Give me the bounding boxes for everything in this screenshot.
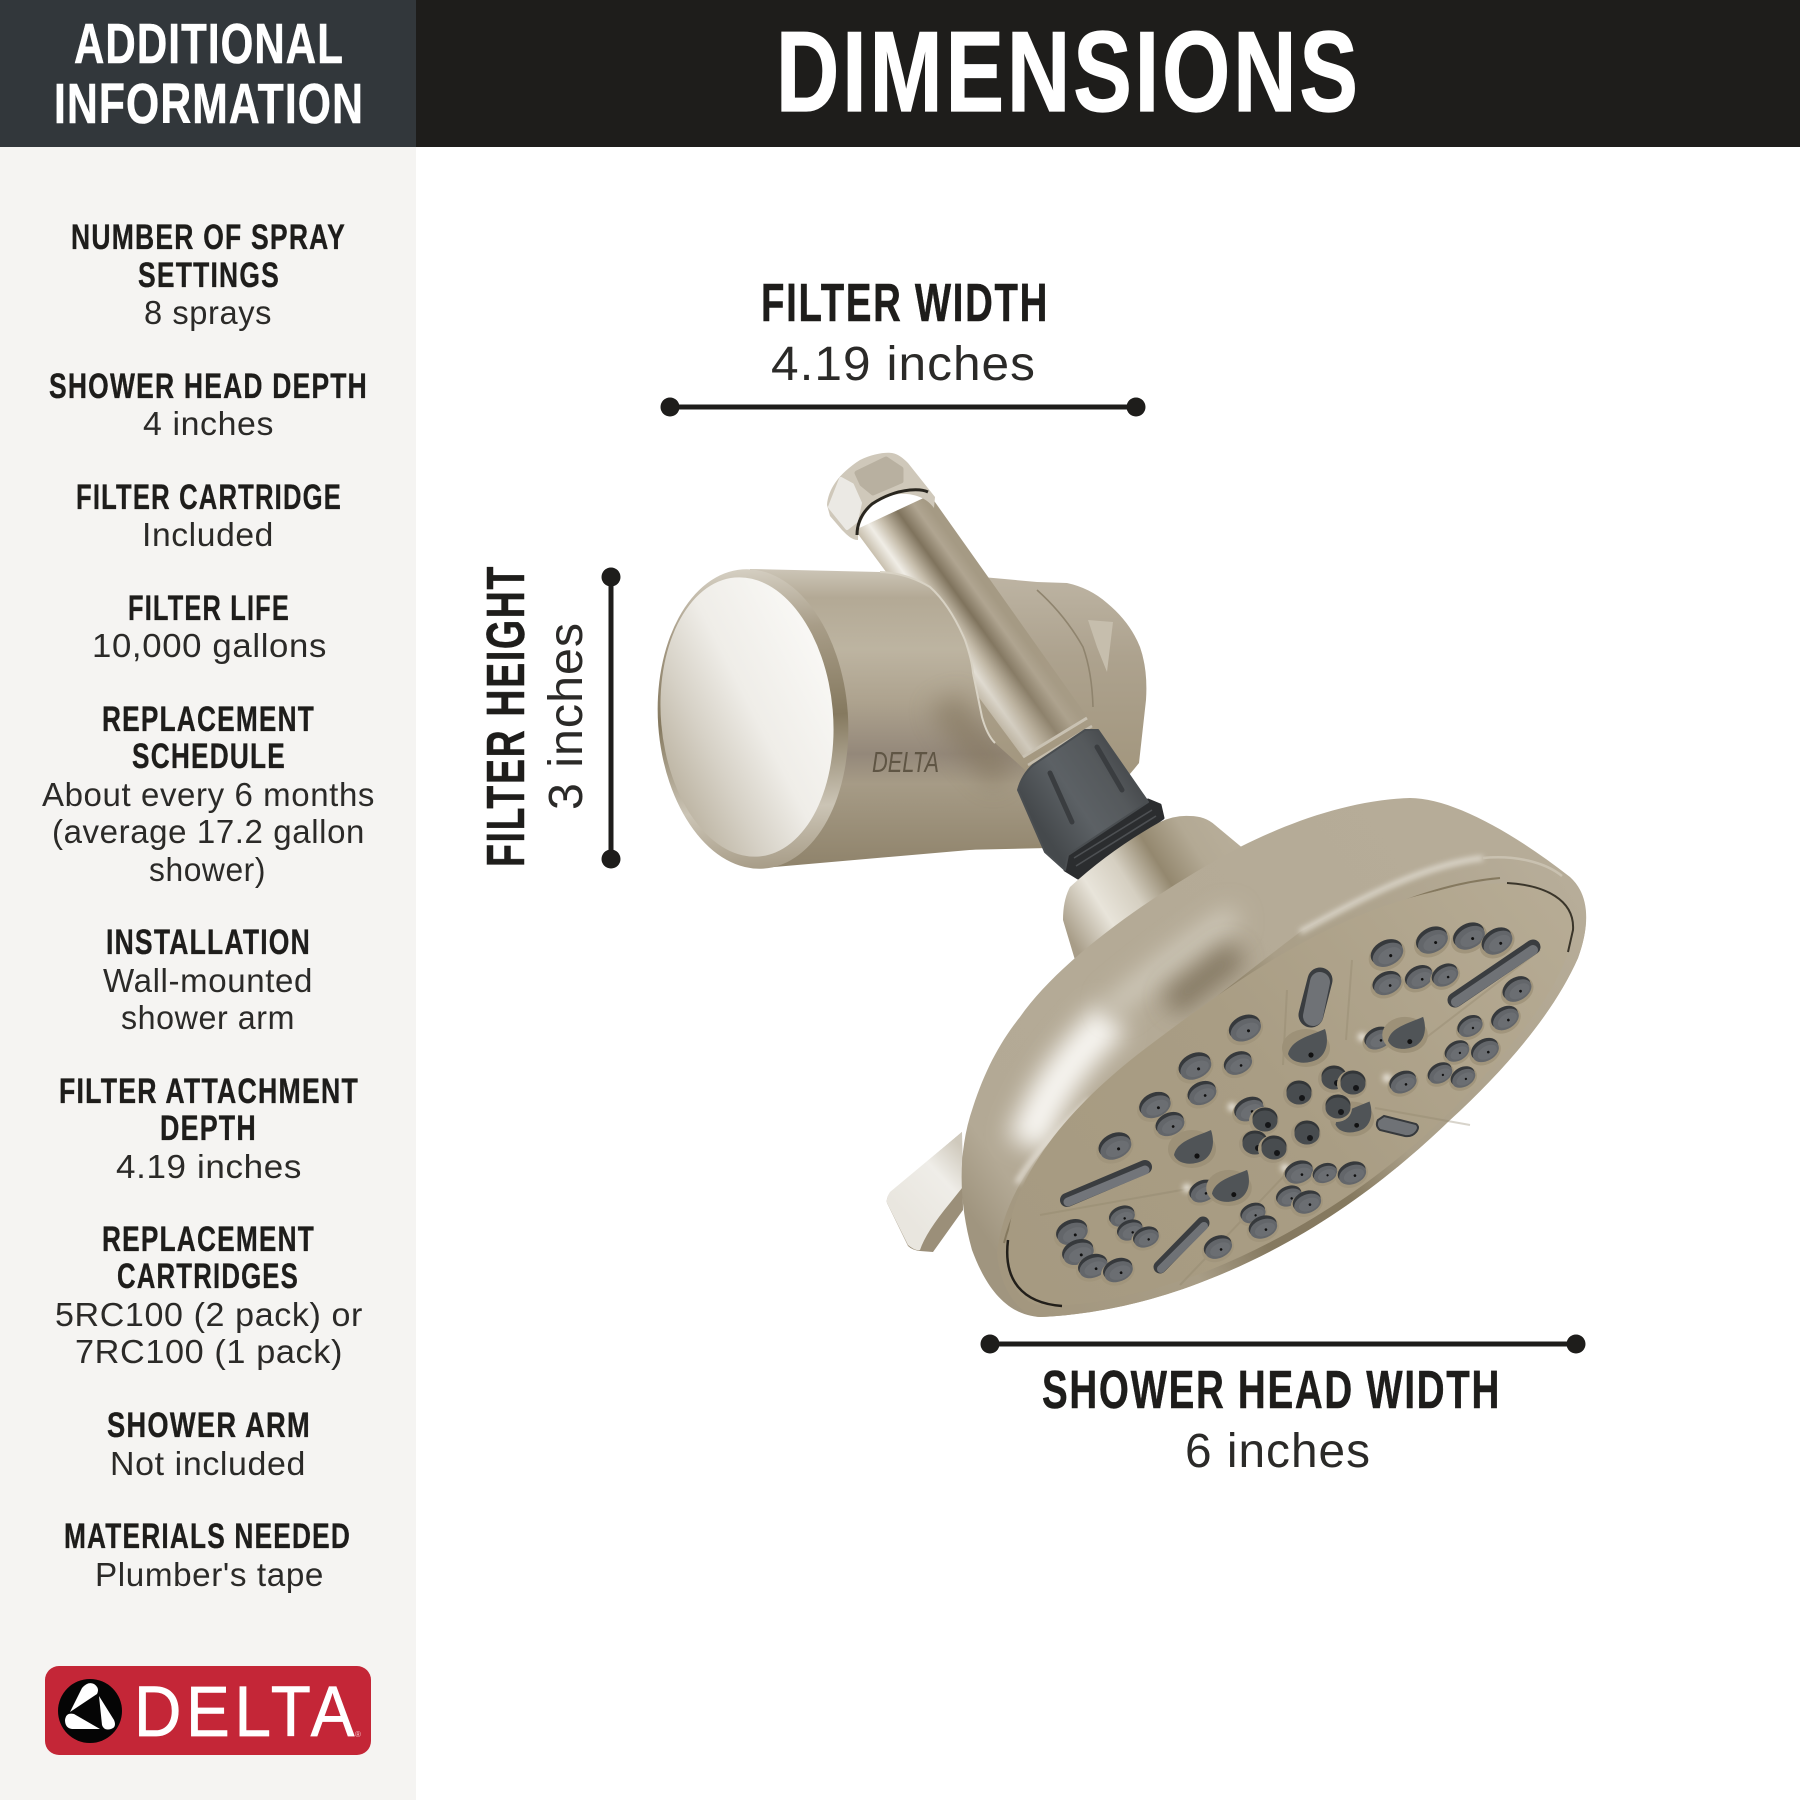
spec: replacement cartridges: REPLACEMENT — [102, 1220, 315, 1259]
spec: filter life: 10,000 gallons — [92, 627, 327, 664]
spray face plate — [1007, 883, 1573, 1306]
spec: filter life: FILTER LIFE — [128, 589, 290, 628]
left header: additional information: INFORMATION — [54, 72, 364, 136]
spec: replacement schedule: (average 17.2 gallon — [52, 813, 365, 850]
dimension line: shower head width — [980, 1334, 1586, 1354]
dark coupling nut — [1018, 730, 1163, 878]
spec: number of spray settings: SETTINGS — [138, 256, 280, 295]
spec: number of spray settings: NUMBER OF SPRAY — [71, 218, 346, 257]
spec: installation — [103, 923, 313, 1036]
product illustration: shower head with filter — [648, 453, 1586, 1317]
arm hex fitting — [827, 453, 935, 540]
spec: filter attachment depth: DEPTH — [160, 1109, 257, 1148]
left header: additional information: ADDITIONAL — [74, 12, 344, 76]
title: dimensions: DIMENSIONS — [776, 9, 1361, 136]
spec: shower arm: Not included — [110, 1445, 306, 1482]
spec: replacement schedule: REPLACEMENT — [102, 700, 315, 739]
spec: filter cartridge: Included — [142, 516, 274, 553]
spec: filter cartridge — [76, 478, 342, 553]
dimension: shower head width label: 6 inches — [1185, 1425, 1371, 1478]
engraved delta wordmark: DELTA — [872, 747, 939, 779]
shower head back shell — [962, 798, 1586, 1317]
spec: shower head depth: SHOWER HEAD DEPTH — [49, 367, 368, 406]
spec: replacement schedule — [42, 700, 375, 888]
filter front body — [750, 569, 1050, 868]
spray nozzles — [1049, 917, 1539, 1291]
spec: filter attachment depth — [59, 1072, 359, 1185]
spec: shower arm: SHOWER ARM — [107, 1406, 311, 1445]
sidebar panel background — [0, 147, 416, 1800]
spec: installation: INSTALLATION — [106, 923, 311, 962]
left header: additional information — [0, 0, 416, 147]
dimension: filter width label: FILTER WIDTH — [761, 273, 1049, 333]
spec: materials needed: Plumber's tape — [95, 1556, 324, 1593]
delta logo: DELTA — [134, 1673, 359, 1752]
spec: filter cartridge: FILTER CARTRIDGE — [76, 478, 342, 517]
filter end bevel — [648, 563, 858, 875]
spec: shower head depth: 4 inches — [143, 405, 274, 442]
spec: replacement cartridges: 7RC100 (1 pack) — [75, 1333, 343, 1370]
delta logo: ® — [355, 1730, 361, 1739]
filter rear body — [960, 575, 1146, 850]
delta logo — [45, 1666, 371, 1755]
spec: replacement cartridges: 5RC100 (2 pack) or — [55, 1296, 363, 1333]
cone jets — [1168, 1017, 1428, 1206]
lever tab — [887, 1132, 963, 1252]
spec: installation: shower arm — [121, 999, 295, 1036]
dimension: shower head width label — [1042, 1360, 1501, 1478]
dimension: filter height label: FILTER HEIGHT — [476, 565, 536, 867]
spec: replacement schedule: SCHEDULE — [132, 737, 286, 776]
dimension: filter height label: 3 inches — [540, 622, 593, 810]
filter end disc — [649, 570, 845, 864]
spec: replacement cartridges: CARTRIDGES — [117, 1257, 299, 1296]
dimension line: filter width — [660, 398, 1146, 416]
head rim band — [997, 857, 1586, 1317]
shower arm pipe — [855, 495, 1092, 765]
spec: filter attachment depth: 4.19 inches — [116, 1148, 302, 1185]
dimension: filter width label: 4.19 inches — [771, 338, 1036, 391]
title: dimensions — [416, 0, 1800, 147]
spec: number of spray settings: 8 sprays — [144, 294, 272, 331]
spec: filter attachment depth: FILTER ATTACHMENT — [59, 1072, 359, 1111]
dimension line: filter height — [602, 568, 620, 868]
spec: installation: Wall-mounted — [103, 962, 313, 999]
dimension: filter height label — [476, 565, 593, 867]
dimension: shower head width label: SHOWER HEAD WIDTH — [1042, 1360, 1501, 1420]
dimension: filter width label — [761, 273, 1049, 391]
spec: number of spray settings — [71, 218, 346, 331]
spec: shower head depth — [49, 367, 368, 442]
spray bars — [1067, 947, 1533, 1269]
spec: filter life — [92, 589, 327, 664]
head neck collar — [1063, 816, 1245, 965]
spec: replacement schedule: shower) — [149, 851, 266, 888]
spec: shower arm — [107, 1406, 311, 1482]
spec: replacement schedule: About every 6 months — [42, 776, 375, 813]
spec: materials needed: MATERIALS NEEDED — [64, 1517, 351, 1556]
spec: materials needed — [64, 1517, 351, 1593]
spec: replacement cartridges — [55, 1220, 363, 1370]
